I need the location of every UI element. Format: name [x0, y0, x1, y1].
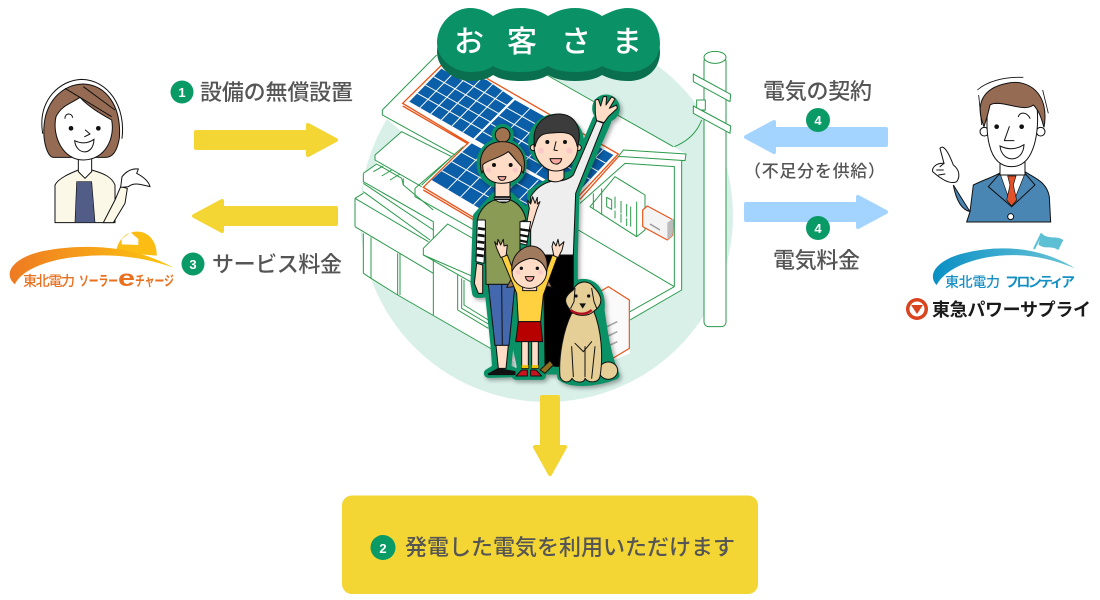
label 1: free installation: 1 — [178, 85, 186, 100]
badge: customers: ま — [612, 26, 642, 59]
logo: Tohoku Solar e-Charge — [10, 232, 174, 291]
logo: Tohoku Solar e-Charge: e — [118, 265, 135, 291]
arrow: down to generation — [535, 397, 565, 474]
meter box — [590, 177, 645, 237]
badge 4 lower: 4 — [814, 221, 822, 236]
illustration: man advisor — [933, 77, 1051, 222]
badge: customers: さ — [561, 26, 591, 59]
label 4: contract: 電気の契約 — [763, 79, 872, 104]
badge 4 upper: 4 — [814, 113, 822, 128]
illustration: house with solar panels — [355, 51, 731, 377]
label 1: free installation: 設備の無償設置 — [200, 80, 353, 105]
arrow: service fee — [194, 201, 336, 231]
dog — [560, 282, 618, 382]
panel: generated electricity: 2 — [379, 541, 387, 556]
badge 4 upper — [806, 108, 830, 132]
panel: generated electricity — [342, 496, 758, 594]
green outline silhouette — [475, 99, 615, 381]
logo: Tohoku Frontier — [933, 233, 1075, 290]
arrow: electricity fee — [746, 197, 886, 227]
arrow: equipment to customer — [196, 125, 336, 155]
solar panels — [402, 64, 620, 220]
logo: Tohoku Solar e-Charge: チャージ — [135, 273, 174, 289]
storage battery — [597, 287, 629, 360]
arrow: supply — [746, 122, 886, 152]
illustration: family and dog — [474, 97, 618, 382]
badge: customers: お — [454, 26, 484, 59]
badge: customers: 客 — [507, 26, 537, 59]
illustration: woman advisor — [42, 79, 150, 223]
note: shortfall supply: （不足分を供給） — [744, 162, 885, 181]
power conditioner — [643, 206, 673, 240]
panel: generated electricity: 発電した電気を利用いただけます — [405, 535, 735, 560]
logo: Tohoku Solar e-Charge: 東北電力 — [23, 273, 75, 289]
logo: Tohoku Solar e-Charge: ソーラー — [79, 273, 118, 289]
utility pole — [693, 51, 731, 327]
house body — [355, 55, 702, 377]
logo: Tohoku Frontier: フロンティア — [1005, 274, 1075, 290]
label 3: service fee: 3 — [189, 257, 197, 272]
label 3: service fee: サービス料金 — [212, 252, 342, 277]
girl — [495, 239, 564, 376]
background circle — [360, 29, 733, 402]
logo: Tokyu Power Supply: 東急パワーサプライ — [932, 299, 1091, 320]
badge 4 lower — [806, 216, 830, 240]
badge: customers — [437, 8, 660, 81]
label 4: electricity fee: 電気料金 — [773, 248, 860, 273]
logo: Tohoku Frontier: 東北電力 — [945, 274, 1000, 290]
woman — [474, 128, 540, 375]
man — [530, 97, 617, 373]
